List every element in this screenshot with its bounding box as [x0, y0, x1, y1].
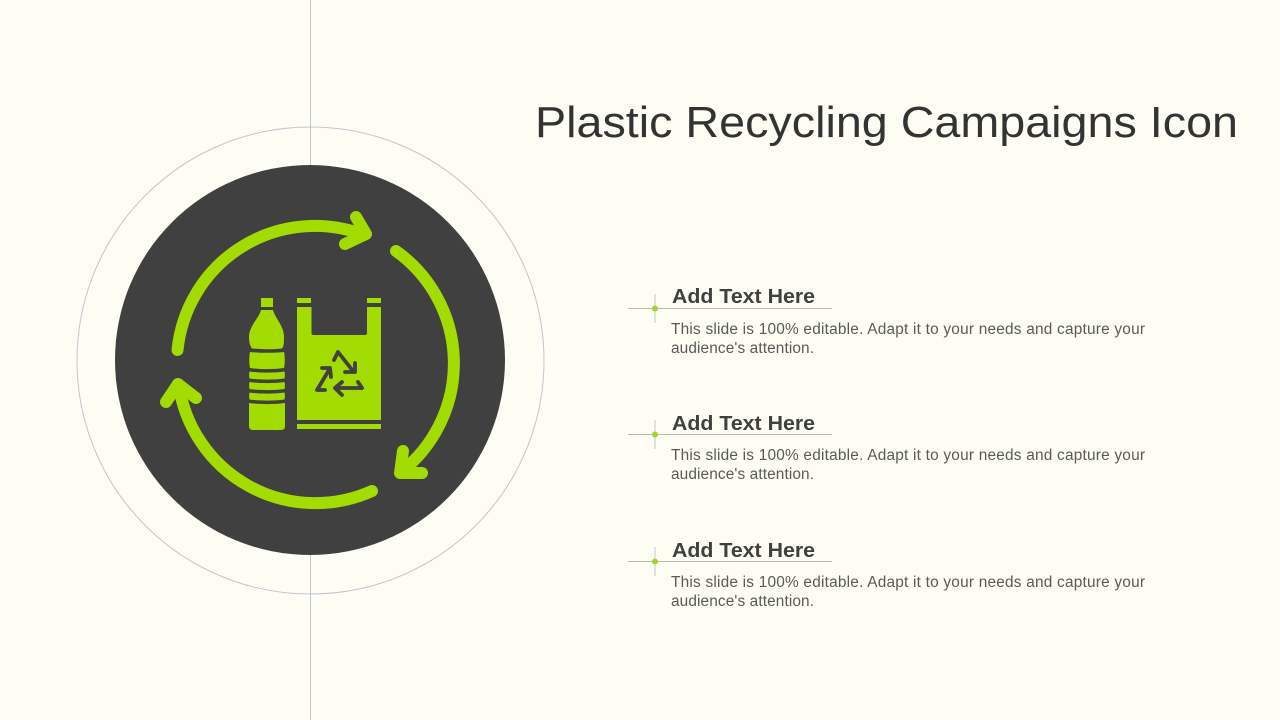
marker: crosshair and divider: [628, 420, 832, 449]
body text: This slide is 100% editable. Adapt it to your needs and capture your: [671, 321, 1145, 338]
dark central circle: [115, 165, 505, 555]
marker: crosshair and divider: [628, 547, 832, 576]
item 2: [628, 413, 1145, 483]
body text: audience's attention.: [671, 466, 814, 483]
item 1: [628, 286, 1145, 357]
outer ring: [77, 127, 544, 594]
recycling symbol: [317, 352, 362, 395]
item 3: [628, 540, 1145, 610]
heading: Add Text Here: [672, 286, 815, 308]
arrow: right: [396, 251, 454, 473]
heading: Add Text Here: [672, 540, 815, 562]
body text: audience's attention.: [671, 593, 814, 610]
arrow: top: [178, 217, 366, 350]
arrow: bottom: [166, 384, 372, 503]
body text: This slide is 100% editable. Adapt it to your needs and capture your: [671, 574, 1145, 591]
bag handle tabs and bottom stripe: [297, 298, 381, 429]
icon: circular recycling arrows: [166, 217, 454, 503]
body text: This slide is 100% editable. Adapt it to your needs and capture your: [671, 447, 1145, 464]
icon: plastic bag with recycling symbol: [297, 298, 381, 429]
bag body: [297, 307, 381, 420]
title: Plastic Recycling Campaigns Icon: [535, 98, 1238, 147]
icon: plastic bottle: [249, 298, 285, 430]
marker: crosshair and divider: [628, 294, 832, 323]
heading: Add Text Here: [672, 413, 815, 435]
body text: audience's attention.: [671, 340, 814, 357]
